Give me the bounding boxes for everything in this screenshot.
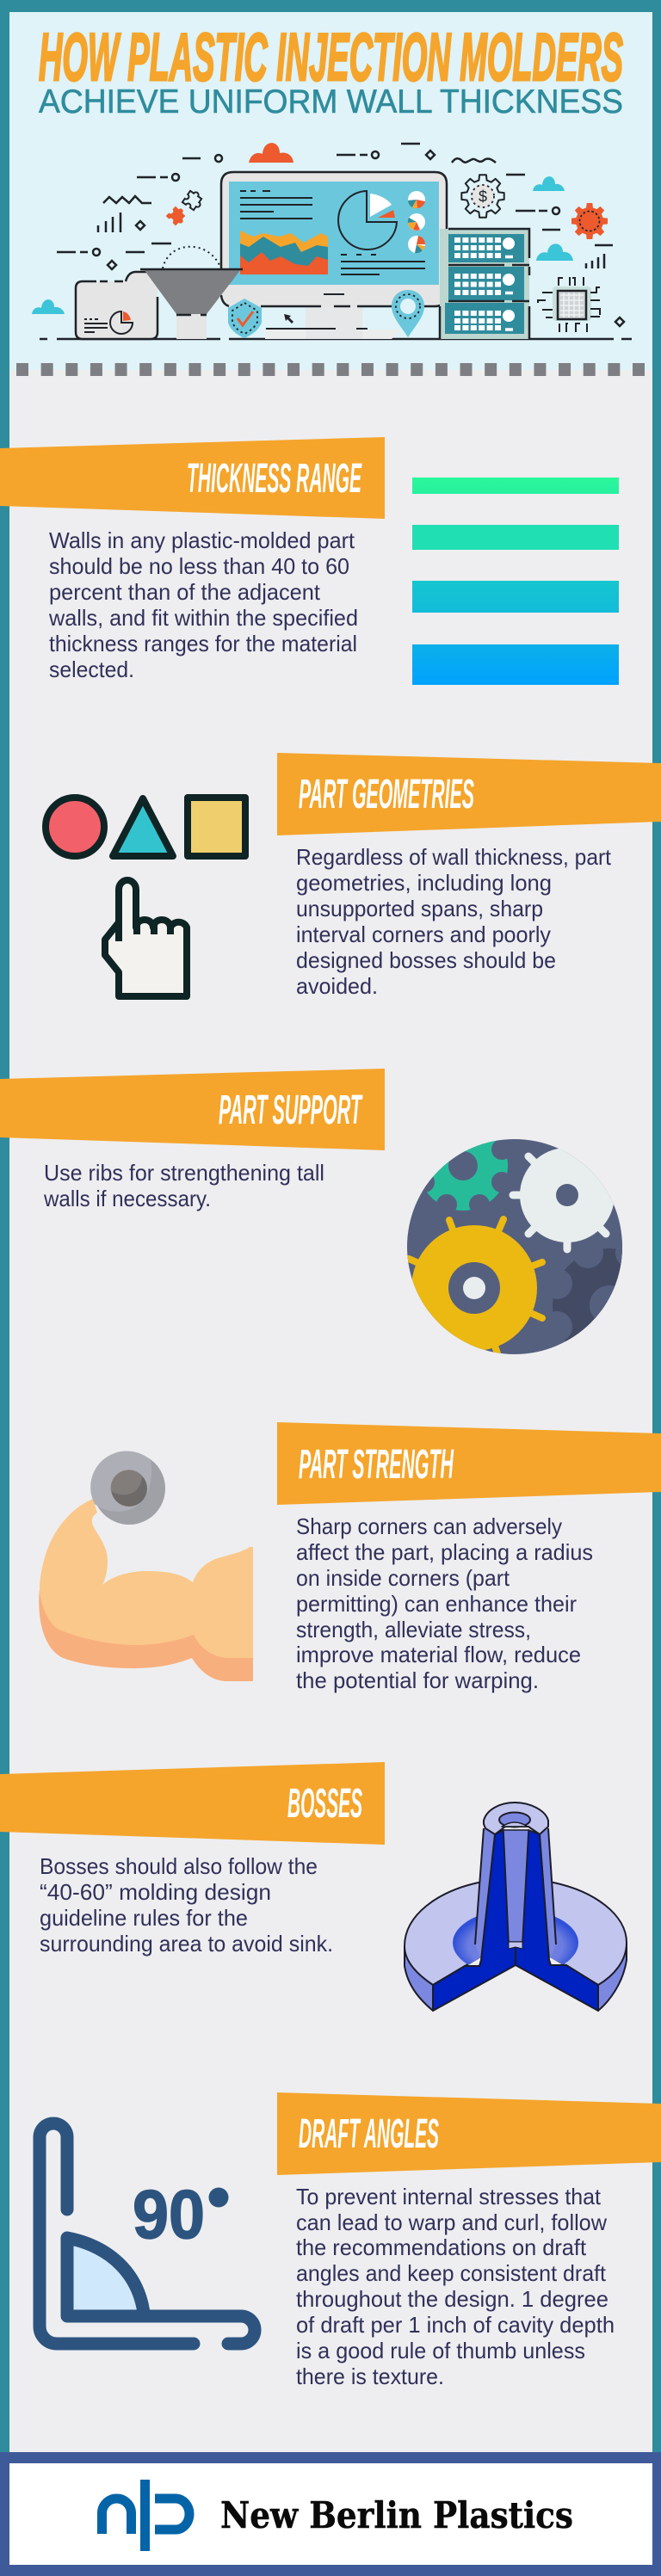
section: part strength [39,1422,661,1693]
pie chart [338,191,397,250]
body text [296,1513,593,1693]
gear with dollar sign: $ [479,188,487,205]
ribbon [0,1762,385,1845]
icon: flexed arm with dumbbell [39,1451,253,1681]
body text: throughout the design. 1 degree [296,2286,608,2312]
icon: shapes [46,798,245,856]
body text [296,2184,615,2389]
body text: Walls in any plastic-molded part [49,527,355,553]
ribbon [0,1069,385,1150]
body text: selected. [49,656,134,682]
section: part strength: PART STRENGTH [299,1442,454,1488]
body text: permitting) can enhance their [296,1591,577,1617]
funnel body [140,269,243,315]
gear with dollar sign [461,175,504,218]
dark gear [553,1240,622,1341]
body text: To prevent internal stresses that [296,2184,602,2209]
body text: Sharp corners can adversely [296,1513,562,1539]
white gear [513,1148,615,1249]
body text: designed bosses should be [296,947,556,973]
body text: angles and keep consistent draft [296,2260,607,2286]
icon: boss cross-section [405,1803,627,2011]
section: draft angles: DRAFT ANGLES [299,2111,439,2157]
icon: gears [407,1139,622,1354]
body text: surrounding area to avoid sink. [40,1931,333,1957]
body text: should be no less than 40 to 60 [49,553,349,579]
icon: 90 degree angle [40,2123,255,2344]
body text: the recommendations on draft [296,2234,587,2260]
body text: on inside corners (part [296,1565,510,1591]
microchip [538,277,600,332]
section: thickness range: THICKNESS RANGE [187,456,362,502]
body text: walls, and fit within the specified [48,605,358,631]
section: part support [0,1069,622,1354]
section: part geometries [46,753,661,999]
body text: “40-60” molding design [40,1879,271,1905]
body text: there is texture. [296,2363,444,2389]
logo mark [102,2480,189,2551]
orange gear [571,203,608,239]
cursor [284,314,293,324]
body text [48,527,358,682]
divider [16,363,647,376]
body text [40,1853,333,1957]
ground line [40,338,632,340]
body text: unsupported spans, sharp [296,896,543,921]
ribbon [277,1422,661,1505]
server rack [440,229,529,339]
body text: Bosses should also follow the [40,1853,318,1879]
body text: avoided. [296,973,378,999]
section: thickness range [0,437,619,685]
body text: improve material flow, reduce [296,1642,581,1667]
body text: interval corners and poorly [296,921,551,947]
green gear [422,1139,508,1211]
body text: affect the part, placing a radius [296,1539,593,1565]
ribbon [277,2092,661,2175]
section: part support: PART SUPPORT [219,1088,363,1133]
body text: percent than of the adjacent [49,579,321,605]
body text: can lead to warp and curl, follow [296,2209,607,2235]
location pin [392,290,424,337]
ribbon [277,753,661,835]
body text: of draft per 1 inch of cavity depth [296,2312,615,2338]
body text: is a good rule of thumb unless [296,2338,585,2363]
title line 2: ACHIEVE UNIFORM WALL THICKNESS [39,83,623,120]
footer [0,2452,661,2576]
icon: 90 degree angle: 90 [133,2176,205,2252]
body text: guideline rules for the [40,1905,248,1931]
section: draft angles [40,2092,661,2389]
funnel [163,247,219,339]
section: bosses: BOSSES [287,1781,362,1827]
body text [43,1160,324,1211]
body text: thickness ranges for the material [49,631,357,656]
folder [76,272,158,339]
body text: Use ribs for strengthening tall [44,1160,324,1186]
body text: strength, alleviate stress, [296,1617,531,1642]
ribbon [0,437,385,519]
thickness bars [412,478,619,685]
header title [39,19,623,120]
shield [228,299,262,338]
section: bosses [0,1762,627,2011]
company name: New Berlin Plastics [220,2494,573,2536]
clouds [32,143,573,314]
monitor [221,172,447,339]
yellow gear [409,1219,542,1353]
area chart [240,231,328,274]
body text: geometries, including long [296,870,552,896]
small pies [408,191,425,253]
body text [296,844,612,999]
body text: Regardless of wall thickness, part [296,844,612,870]
body text: walls if necessary. [43,1186,211,1211]
decorative dashes and rings [57,144,624,326]
header illustration [32,143,632,339]
icon: pointing hand [105,880,187,996]
puzzle pieces [166,188,205,227]
body text: the potential for warping. [296,1667,539,1693]
